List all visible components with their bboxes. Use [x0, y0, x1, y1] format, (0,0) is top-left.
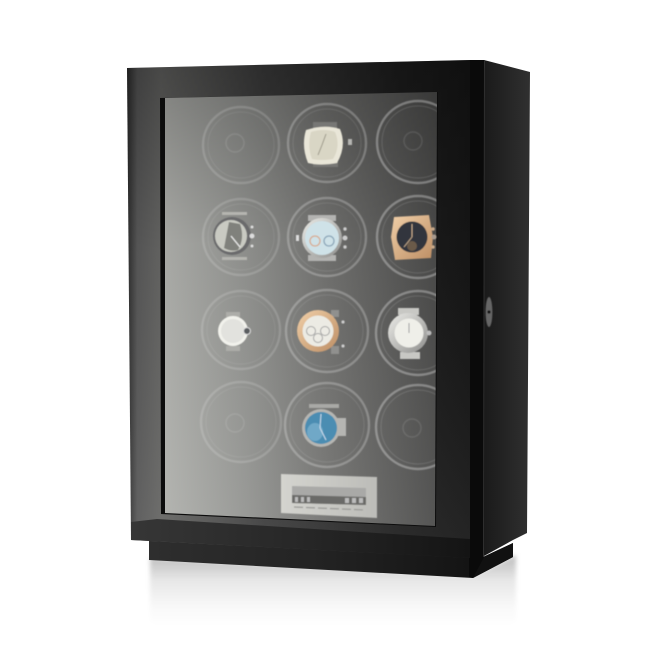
watch: cream tonneau: [304, 122, 352, 167]
glass window: [160, 92, 438, 527]
watch: white round: [218, 312, 250, 351]
control panel: [281, 474, 377, 518]
watch: rose chronograph: [297, 310, 345, 354]
ring row 3: [202, 290, 460, 375]
display screen: [292, 486, 366, 505]
ring row 4: [201, 382, 460, 469]
side lock: [486, 297, 492, 327]
front door frame: [127, 60, 470, 558]
empty holder emblems: [226, 132, 422, 437]
cabinet plinth base: [149, 535, 513, 578]
watch: pale blue chronograph: [296, 215, 348, 261]
watch: blue dial: [302, 404, 346, 447]
lower lip: [131, 519, 470, 558]
watch: steel sport: [388, 308, 432, 359]
ring row 1: [203, 101, 459, 183]
ring row 2: [203, 196, 459, 278]
panel print lines: [294, 507, 365, 510]
illustration: watch winder cabinet: [127, 60, 530, 604]
cabinet side panel: [469, 60, 530, 578]
watch: grey diver: [213, 212, 254, 260]
watch: rose gold: [391, 215, 436, 260]
winder rings: [201, 101, 460, 469]
floor reflection: [150, 555, 516, 625]
